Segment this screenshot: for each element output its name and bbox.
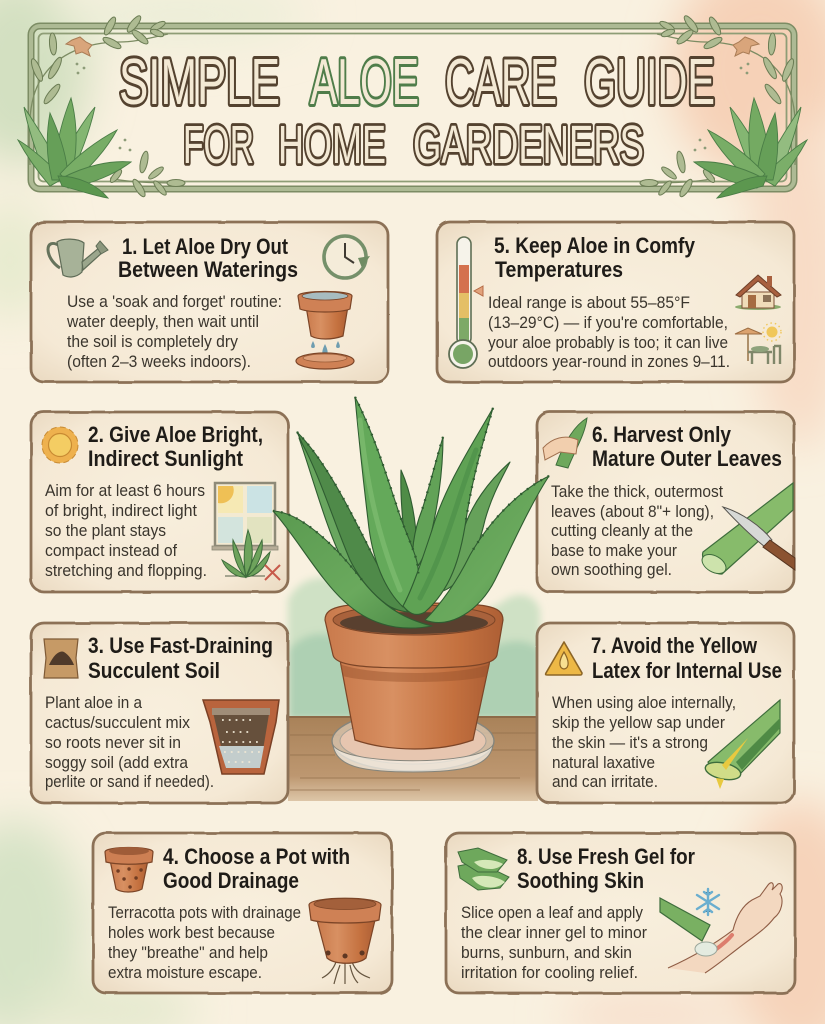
- body text: your aloe probably is too; it can live: [488, 334, 728, 352]
- title line 1: GUIDE: [584, 45, 715, 118]
- body text: the clear inner gel to minor: [461, 924, 647, 942]
- icon: leaf being cut by knife: [699, 483, 795, 577]
- body text: [66, 293, 282, 371]
- body text: holes work best because: [108, 924, 275, 942]
- heading: [118, 234, 298, 282]
- body text: [45, 694, 214, 791]
- body text: compact instead of: [45, 542, 177, 560]
- heading: 5. Keep Aloe in Comfy: [494, 233, 695, 258]
- panel: tip 5 temperatures: [437, 222, 794, 382]
- icon: soil bag: [44, 639, 78, 678]
- icon: aloe gel slices: [458, 848, 509, 890]
- heading: [517, 844, 695, 893]
- heading: [88, 422, 263, 471]
- panel: tip 3 soil: [31, 623, 288, 803]
- body text: they "breathe" and help: [108, 944, 268, 962]
- body text: the skin — it's a strong: [552, 734, 708, 752]
- body text: (often 2–3 weeks indoors).: [67, 353, 251, 371]
- banner left foliage: [18, 14, 185, 198]
- body text: Take the thick, outermost: [551, 483, 723, 501]
- title line 2: [183, 115, 644, 175]
- leaves of header aloe: [18, 98, 131, 198]
- wooden table: [288, 716, 538, 801]
- body text: base to make your: [551, 542, 677, 560]
- icon: warning triangle with droplet: [546, 642, 582, 675]
- body text: of bright, indirect light: [45, 502, 197, 520]
- body text: outdoors year-round in zones 9–11.: [488, 353, 730, 371]
- body text: [488, 294, 730, 371]
- body text: Aim for at least 6 hours: [45, 482, 205, 500]
- panel: tip 8 gel: [446, 833, 795, 993]
- title line 1: [119, 45, 715, 118]
- heading: 2. Give Aloe Bright,: [88, 422, 263, 447]
- icon: aloe leaf squeezing gel: [660, 898, 717, 956]
- heading: [592, 422, 782, 471]
- heading: Succulent Soil: [88, 658, 220, 683]
- body text: cutting cleanly at the: [551, 522, 693, 540]
- heading: Good Drainage: [163, 868, 299, 893]
- body text: irritation for cooling relief.: [461, 964, 638, 982]
- heading: Mature Outer Leaves: [592, 446, 782, 471]
- body text: so roots never sit in: [45, 734, 181, 752]
- body text: (13–29°C) — if you're comfortable,: [488, 314, 728, 332]
- pot rim: [325, 603, 503, 668]
- body text: [461, 904, 647, 982]
- body text: burns, sunburn, and skin: [461, 944, 632, 962]
- body text: leaves (about 8"+ long),: [551, 503, 714, 521]
- pot opening: [333, 605, 495, 635]
- body text: Ideal range is about 55–85°F: [488, 294, 690, 312]
- heading: 3. Use Fast-Draining: [88, 633, 273, 658]
- icon: patio with umbrella and sun: [735, 323, 781, 364]
- title line 2: FOR: [183, 115, 254, 175]
- icon: window with small aloe: [212, 483, 280, 580]
- body text: [552, 694, 736, 791]
- icon: thermometer: [449, 237, 483, 368]
- body text: extra moisture escape.: [108, 964, 262, 982]
- body text: [108, 904, 301, 982]
- body text: the soil is completely dry: [67, 333, 239, 351]
- heading: Indirect Sunlight: [88, 446, 243, 471]
- body text: perlite or sand if needed).: [45, 773, 214, 791]
- icon: pot with drainage holes and roots: [309, 898, 381, 984]
- body text: water deeply, then wait until: [66, 313, 259, 331]
- banner right foliage: [640, 14, 807, 198]
- body text: When using aloe internally,: [552, 694, 736, 712]
- heading: [88, 633, 273, 683]
- body text: Slice open a leaf and apply: [461, 904, 644, 922]
- body text: natural laxative: [552, 754, 655, 772]
- body text: so the plant stays: [45, 522, 166, 540]
- body text: skip the yellow sap under: [552, 714, 725, 732]
- icon: watering can: [48, 239, 108, 277]
- heading: 1. Let Aloe Dry Out: [122, 234, 288, 259]
- body text: [45, 482, 207, 580]
- pot rim shadow: [340, 664, 490, 682]
- banner frame: [31, 26, 794, 189]
- heading: Latex for Internal Use: [592, 658, 782, 683]
- body text: cactus/succulent mix: [45, 714, 191, 732]
- icon: small terracotta pot: [105, 847, 153, 892]
- soil: [340, 612, 488, 634]
- body text: Plant aloe in a: [45, 694, 143, 712]
- body text: stretching and flopping.: [45, 562, 207, 580]
- icon: pot with water draining into saucer: [296, 292, 354, 369]
- terracotta pot body: [340, 660, 490, 749]
- glass saucer: [332, 711, 494, 771]
- heading: 7. Avoid the Yellow: [591, 633, 757, 658]
- heading: 4. Choose a Pot with: [163, 844, 350, 869]
- panel: tip 7 latex: [537, 623, 794, 803]
- heading: 6. Harvest Only: [592, 422, 731, 447]
- panel: tip 2 sunlight: [31, 412, 288, 592]
- icon: hand holding leaf: [543, 418, 587, 468]
- saucer front rim: [333, 745, 493, 772]
- title line 1: CARE: [445, 45, 557, 118]
- heading: Temperatures: [495, 257, 623, 282]
- body text: own soothing gel.: [551, 561, 672, 579]
- title line 1: ALOE: [310, 45, 419, 118]
- watercolour green hills behind the plant: [288, 578, 540, 720]
- title line 2: GARDENERS: [413, 115, 644, 175]
- central aloe plant in terracotta pot: [273, 397, 549, 772]
- heading: Soothing Skin: [517, 868, 644, 893]
- icon: arm with burn: [668, 883, 782, 973]
- title line 1: SIMPLE: [119, 45, 280, 118]
- heading: [494, 233, 695, 282]
- icon: snowflake: [697, 889, 719, 915]
- heading: Between Waterings: [118, 257, 298, 282]
- heading: [163, 844, 350, 893]
- icon: house: [735, 275, 781, 310]
- body text: Use a 'soak and forget' routine:: [67, 293, 282, 311]
- title banner: [18, 14, 807, 198]
- aloe leaves: [273, 397, 549, 628]
- icon: pot cross section: [203, 700, 279, 774]
- body text: Terracotta pots with drainage: [108, 904, 301, 922]
- icon: cut leaf with yellow latex: [704, 700, 780, 789]
- body text: soggy soil (add extra: [45, 754, 189, 772]
- body text: [551, 483, 723, 579]
- panel: tip 1 dry out: [31, 222, 388, 382]
- panel: tip 6 harvest: [537, 412, 795, 592]
- body text: and can irritate.: [552, 773, 658, 791]
- icon: sun: [42, 427, 78, 463]
- icon: clock: [324, 236, 370, 278]
- panel: tip 4 pot: [93, 833, 392, 993]
- heading: [591, 633, 782, 683]
- title line 2: HOME: [278, 115, 386, 175]
- heading: 8. Use Fresh Gel for: [517, 844, 695, 869]
